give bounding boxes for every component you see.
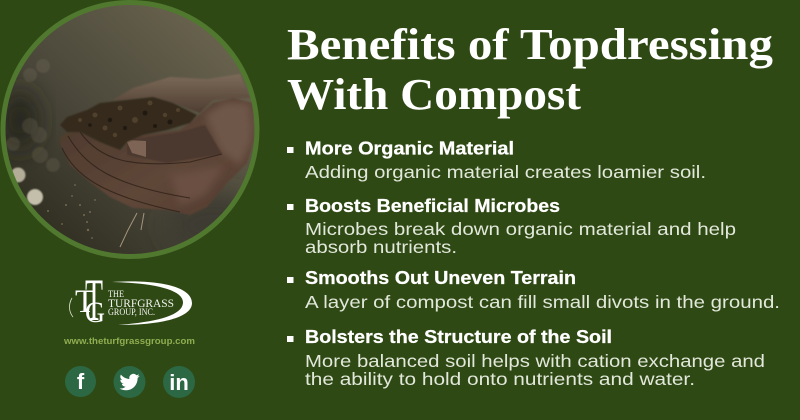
benefit: boosts beneficial microbes: Microbes break down organic material and help: [305, 219, 736, 239]
benefit: smooths out uneven terrain: A layer of compost can fill small divots in the ground.: [305, 292, 780, 312]
website url: www.theturfgrassgroup.com: [63, 336, 195, 346]
title: Benefits of Topdressing: [287, 20, 773, 69]
logo monogram: T: [85, 267, 103, 333]
benefit: boosts beneficial microbes: absorb nutrients.: [305, 237, 457, 257]
benefit: boosts beneficial microbes: Boosts Beneficial Microbes: [305, 196, 560, 216]
logo monogram: G: [85, 296, 105, 329]
thumbnail: [126, 140, 146, 157]
benefit: bolsters the structure of the soil: Bolsters the Structure of the Soil: [305, 327, 612, 347]
icon: facebook: f: [77, 369, 85, 394]
benefit: boosts beneficial microbes: [287, 196, 736, 257]
icon: linkedin: [163, 366, 195, 398]
logo wordmark: THE: [108, 289, 124, 299]
benefit: more organic material: [287, 138, 706, 182]
benefit: smooths out uneven terrain: Smooths Out Uneven Terrain: [305, 268, 576, 288]
photo: hands holding soil in a circular frame: [0, 0, 265, 260]
benefit: bolsters the structure of the soil: the ability to hold onto nutrients and water.: [305, 369, 695, 389]
benefit: smooths out uneven terrain: [287, 268, 780, 312]
logo: The Turfgrass Group, Inc.: [69, 267, 192, 333]
title: [287, 20, 773, 119]
logo monogram: [75, 267, 105, 333]
logo swoosh: [112, 281, 192, 325]
benefit: more organic material: Adding organic material creates loamier soil.: [305, 162, 706, 182]
icon: linkedin: in: [169, 370, 189, 395]
logo wordmark: GROUP, INC.: [108, 308, 155, 318]
benefit: bolsters the structure of the soil: More balanced soil helps with cation exchange and: [305, 351, 765, 371]
title: With Compost: [287, 70, 581, 119]
benefit: bolsters the structure of the soil: [287, 327, 765, 389]
benefit: more organic material: More Organic Material: [305, 138, 514, 158]
logo monogram: T: [75, 284, 95, 320]
icon: twitter: [114, 366, 146, 398]
icon: facebook: [65, 366, 96, 397]
logo wordmark: TURFGRASS: [108, 296, 174, 310]
logo wordmark: [108, 289, 174, 318]
